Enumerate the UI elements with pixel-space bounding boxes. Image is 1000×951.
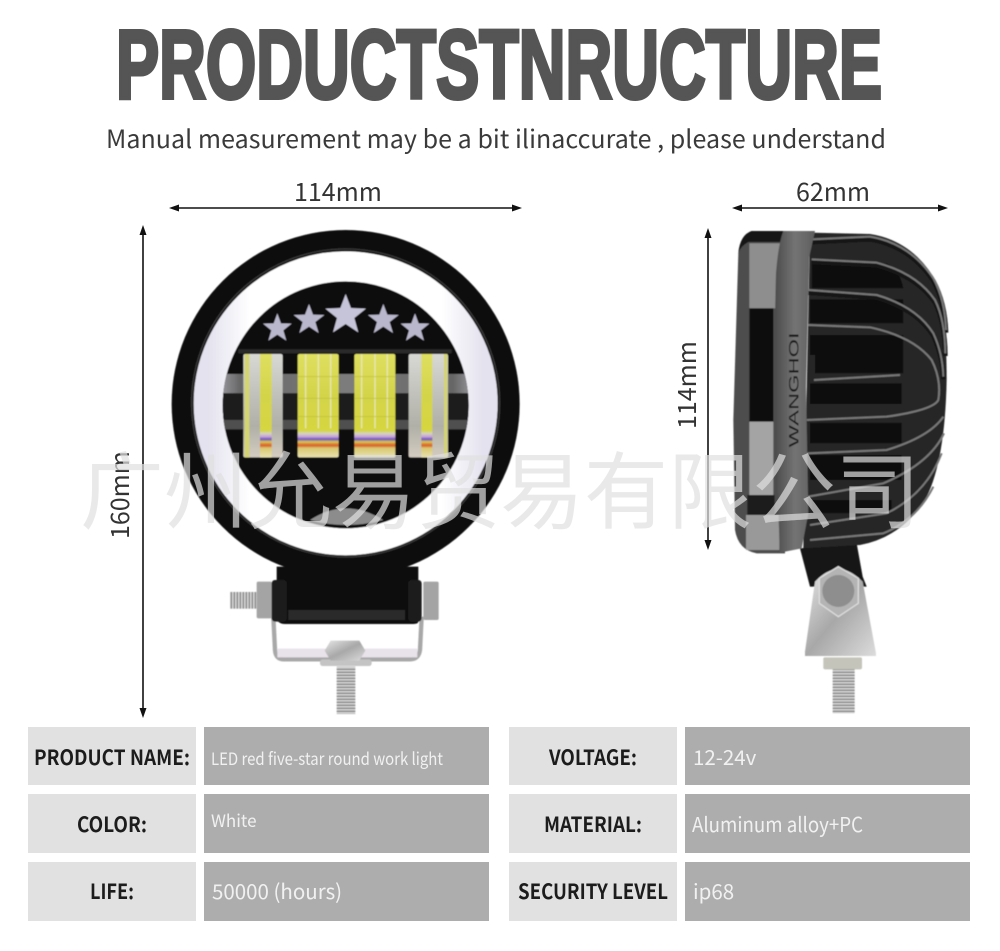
subtitle: Manual measurement may be a bit ilinaccurate , please understand (106, 120, 886, 156)
dimension: side depth 62mm (732, 173, 948, 212)
brand mark: WANGHOI (785, 332, 801, 447)
row: color: COLOR: (77, 809, 147, 839)
LED lens 3 (354, 354, 395, 457)
lower reflector (310, 508, 383, 525)
front view lamp (172, 230, 520, 714)
lens band reflections (220, 349, 473, 429)
watermark: 广州允易贸易有限公司 (80, 426, 920, 547)
row: product name: LED red five-star round work light (211, 745, 444, 770)
dimension: front width 114mm: 114mm (294, 173, 382, 209)
row: voltage (509, 727, 970, 785)
row: voltage: VOLTAGE: (548, 742, 637, 772)
LED lens 2 (298, 354, 339, 457)
dimension: side height 114mm (668, 228, 712, 550)
spec table: right column (509, 727, 970, 921)
outer black housing (172, 230, 520, 578)
dimension: front height 160mm: 160mm (101, 451, 137, 539)
side mount (800, 543, 876, 713)
row: life: LIFE: (90, 876, 134, 906)
white halo ring (209, 266, 483, 540)
row: security level: SECURITY LEVEL (518, 876, 668, 906)
row: security level (509, 862, 970, 921)
side view lamp (733, 231, 947, 713)
metal band (775, 231, 815, 553)
dimension: front height 160mm (101, 225, 146, 718)
row: material (509, 794, 970, 853)
row: material: MATERIAL: (544, 809, 642, 839)
dimension: side depth 62mm: 62mm (796, 173, 870, 209)
row: material: Aluminum alloy+PC (692, 808, 863, 838)
row: product name: PRODUCT NAME: (34, 742, 190, 772)
dimension: side height 114mm: 114mm (668, 341, 704, 429)
row: life: 50000 (hours) (212, 875, 342, 905)
row: color (28, 794, 489, 853)
LED lens 4 (409, 354, 448, 457)
inner black panel (223, 282, 469, 528)
five stars (263, 294, 429, 341)
mounting bracket (230, 567, 439, 714)
row: product name (28, 727, 489, 785)
dimension: front width 114mm (169, 173, 522, 212)
LED lens 1 (243, 354, 283, 457)
front bezel (733, 231, 785, 553)
row: color: White (211, 807, 256, 832)
finned heat sink (803, 233, 947, 548)
spec table: left column (28, 727, 489, 921)
row: security level: ip68 (693, 875, 734, 905)
row: life (28, 862, 489, 921)
row: voltage: 12-24v (693, 741, 757, 771)
